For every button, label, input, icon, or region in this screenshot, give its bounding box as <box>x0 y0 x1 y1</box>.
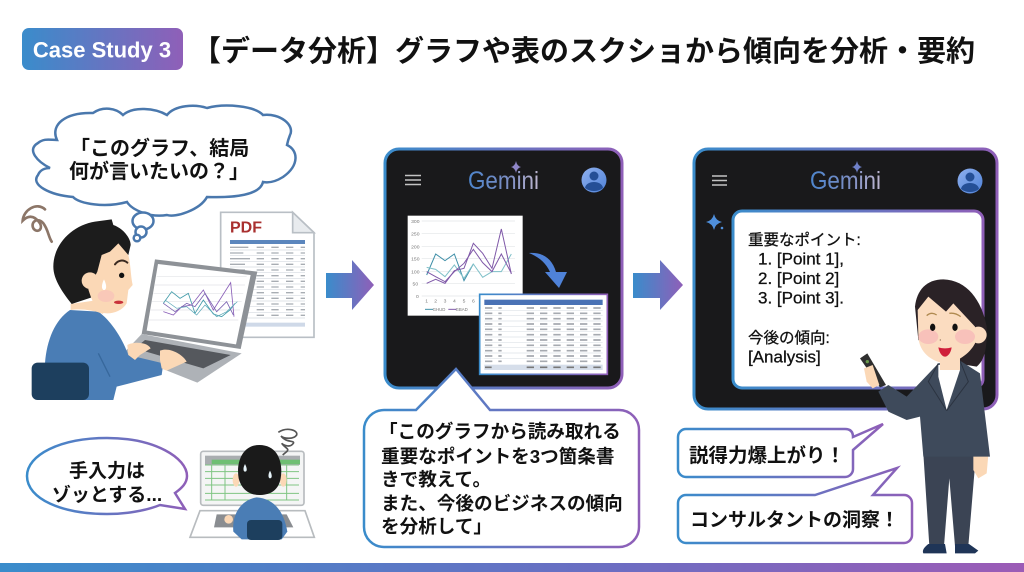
line chart screenshot: 3 <box>444 298 447 304</box>
line chart screenshot: GHUD <box>433 307 445 312</box>
answer text: 3. [Point 3]. <box>758 288 844 308</box>
prompt text: 「このグラフから読み取れる <box>379 421 621 442</box>
line chart screenshot: 4 <box>453 298 456 304</box>
prompt text: を分析して」 <box>381 516 492 537</box>
illustration: man entering spreadsheet data <box>190 429 314 540</box>
desk laptop <box>190 511 314 537</box>
icon: sparkle <box>706 214 723 230</box>
oval speech bubble <box>27 438 187 514</box>
title: 【データ分析】グラフや表のスクショから傾向を分析・要約 <box>192 34 975 68</box>
prompt text: また、今後のビジネスの傾向 <box>381 493 623 514</box>
line chart screenshot: GBAD <box>456 307 468 312</box>
answer card <box>733 211 983 388</box>
remote <box>860 353 886 387</box>
icon: menu <box>712 176 727 185</box>
neck <box>71 300 103 314</box>
prompt speech bubble <box>364 369 639 547</box>
answer text: 1. [Point 1], <box>758 250 844 268</box>
line chart screenshot: 2 <box>434 298 437 304</box>
laptop <box>123 259 257 383</box>
answer text: 重要なポイント: <box>748 231 861 249</box>
hands <box>127 343 187 371</box>
monitor <box>201 451 304 505</box>
line chart screenshot: 300 <box>411 219 420 225</box>
PDF document: PDF <box>230 220 262 237</box>
shoes <box>923 544 978 553</box>
hand right <box>973 455 988 478</box>
panel: Gemini answer screen <box>694 149 997 409</box>
line chart screenshot: 5 <box>463 298 466 304</box>
back of man <box>233 497 287 539</box>
speech bubble: consultant <box>678 468 912 543</box>
consultant text: コンサルタントの洞察！ <box>690 509 899 531</box>
line chart screenshot <box>408 216 523 316</box>
illustration: worried man with laptop <box>23 206 314 400</box>
man head <box>53 219 133 313</box>
oval text: ゾッとする... <box>52 484 162 506</box>
thought text: 何が言いたいの？」 <box>69 159 249 183</box>
answer text: 2. [Point 2] <box>758 269 839 288</box>
icon: avatar <box>582 168 606 192</box>
line chart screenshot: 100 <box>411 269 420 275</box>
header badge <box>22 28 183 70</box>
arrow 2 <box>633 260 683 310</box>
answer text: [Analysis] <box>748 348 821 366</box>
Gemini logo: Gemini <box>468 167 539 195</box>
illustration: presenter woman <box>860 279 990 553</box>
icon: avatar <box>958 168 982 194</box>
line chart screenshot: 50 <box>413 282 418 288</box>
thought text: 「このグラフ、結局 <box>70 136 249 160</box>
jacket <box>878 361 990 457</box>
line chart screenshot: 1 <box>425 298 428 304</box>
header badge: Case Study 3 <box>33 38 171 62</box>
shirt <box>938 362 960 410</box>
suit trousers <box>923 453 976 546</box>
panel: Gemini input screen <box>385 149 622 388</box>
thought cloud <box>33 106 296 241</box>
icon: confused swirl <box>23 206 52 242</box>
hair back <box>915 279 987 367</box>
Gemini logo: Gemini <box>810 167 881 195</box>
speech bubble: persuasion <box>678 424 883 477</box>
man body <box>45 310 163 400</box>
line chart screenshot: 0 <box>416 294 419 300</box>
persuasion text: 説得力爆上がり！ <box>689 444 845 467</box>
icon: menu <box>405 176 421 184</box>
oval text: 手入力は <box>69 460 145 482</box>
icon: swirl <box>278 429 297 455</box>
prompt text: 重要なポイントを3つ箇条書 <box>381 446 614 467</box>
chair <box>32 363 89 400</box>
arrow 1 <box>326 260 374 310</box>
man figure <box>23 206 187 400</box>
PDF document <box>221 212 314 337</box>
line chart screenshot: 150 <box>411 257 420 263</box>
line chart screenshot: 6 <box>472 298 475 304</box>
hand <box>864 365 879 388</box>
line chart screenshot: 250 <box>411 232 420 238</box>
answer text: 今後の傾向: <box>748 329 830 347</box>
data table screenshot <box>480 294 607 374</box>
woman head <box>918 297 987 370</box>
prompt text: きで教えて。 <box>381 469 491 490</box>
curved arrow <box>529 253 567 288</box>
line chart screenshot: 200 <box>411 244 420 250</box>
